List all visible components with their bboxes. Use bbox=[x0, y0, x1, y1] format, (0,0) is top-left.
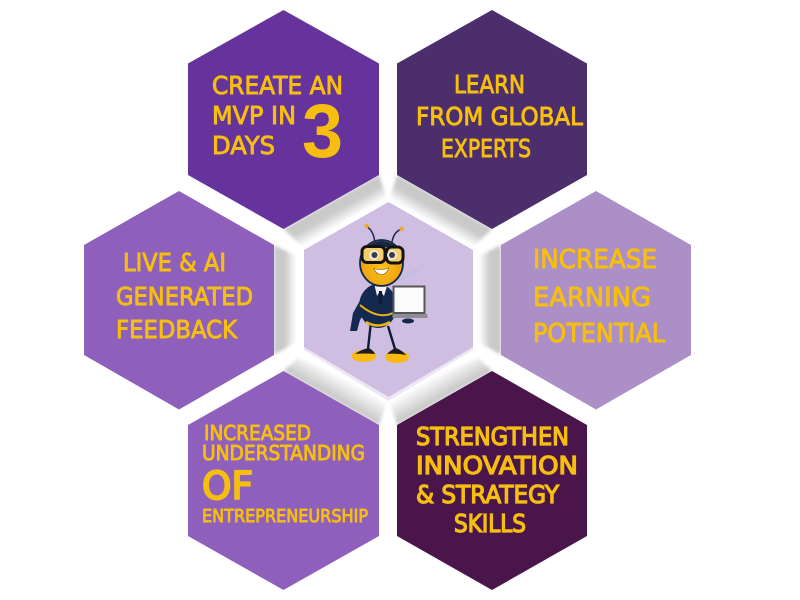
text: create an MVP in days: CREATE AN bbox=[212, 71, 343, 100]
text: increase earning potential: INCREASE bbox=[533, 245, 657, 275]
text: strengthen innovation and strategy skills: INNOVATION bbox=[416, 451, 578, 480]
panel: strengthen innovation and strategy skills bbox=[397, 371, 587, 590]
text: create an MVP in days bbox=[212, 71, 343, 160]
panel: live and AI generated feedback bbox=[84, 191, 274, 410]
text: create an MVP in days: DAYS bbox=[212, 131, 275, 160]
text: increased understanding of entrepreneurship: OF bbox=[202, 464, 253, 508]
panel: create an MVP in 3 days bbox=[188, 10, 379, 229]
panel: learn from global experts bbox=[397, 10, 587, 229]
text: strengthen innovation and strategy skills: & STRATEGY bbox=[416, 480, 560, 509]
text: create an MVP in days: MVP IN bbox=[212, 101, 296, 130]
panel: increase earning potential bbox=[501, 191, 691, 410]
text: learn from global experts bbox=[416, 70, 583, 163]
soft shadows around centre hexagon bbox=[274, 175, 501, 425]
text: learn from global experts: EXPERTS bbox=[441, 134, 531, 163]
icon: bee mascot holding a laptop bbox=[350, 224, 428, 363]
text: live and AI generated feedback: GENERATED bbox=[116, 282, 253, 311]
text: increased understanding of entrepreneurship bbox=[202, 421, 368, 527]
text: increased understanding of entrepreneurship: INCREASED bbox=[204, 421, 311, 445]
panel: increased understanding of entrepreneurship bbox=[188, 371, 379, 590]
text: strengthen innovation and strategy skills: STRENGTHEN bbox=[416, 422, 569, 451]
panel: centre hexagon with bee mascot bbox=[304, 202, 473, 401]
text: learn from global experts: LEARN bbox=[454, 70, 525, 99]
text: increase earning potential: EARNING bbox=[533, 283, 651, 313]
text: strengthen innovation and strategy skills: SKILLS bbox=[454, 509, 526, 538]
text: live and AI generated feedback: FEEDBACK bbox=[116, 315, 238, 344]
text: increase earning potential: POTENTIAL bbox=[533, 319, 666, 349]
text: live and AI generated feedback: LIVE & AI bbox=[123, 248, 226, 277]
large number 3: 3 bbox=[302, 89, 343, 174]
text: strengthen innovation and strategy skills bbox=[416, 422, 578, 538]
text: learn from global experts: FROM GLOBAL bbox=[416, 102, 583, 131]
text: increased understanding of entrepreneurship: UNDERSTANDING bbox=[202, 441, 365, 465]
text: increased understanding of entrepreneurship: ENTREPRENEURSHIP bbox=[202, 506, 368, 527]
text: live and AI generated feedback bbox=[116, 248, 253, 344]
text: increase earning potential bbox=[533, 245, 666, 349]
